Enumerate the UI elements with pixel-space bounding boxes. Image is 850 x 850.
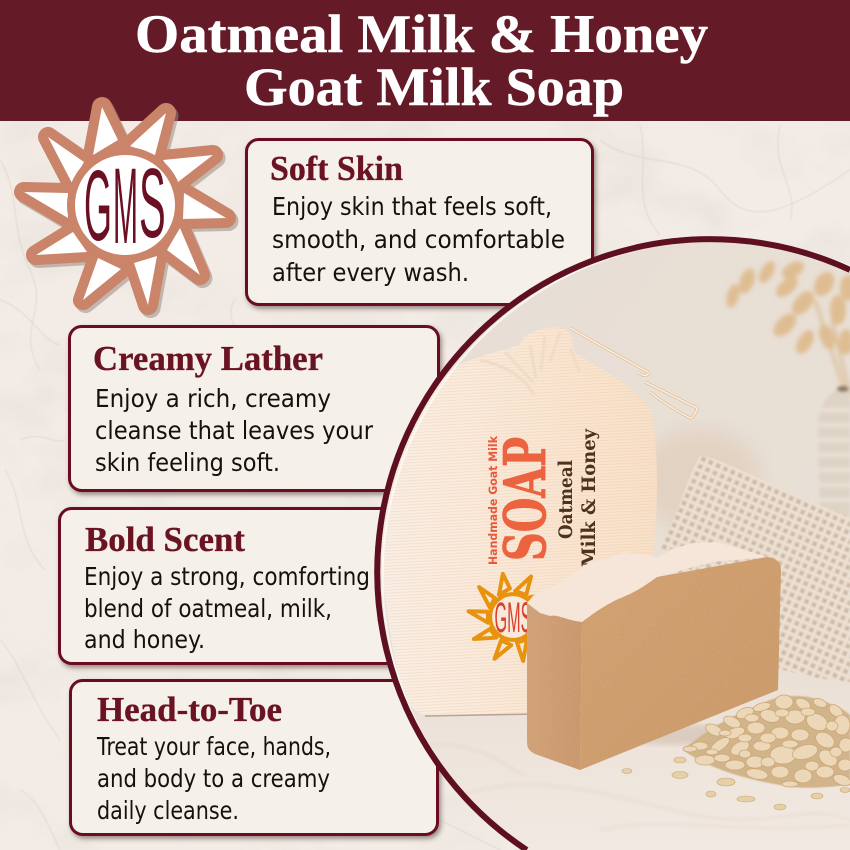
logo center disc (71, 151, 179, 259)
circle border (377, 239, 850, 850)
text: creamy lather: Enjoy a rich, creamy (95, 384, 331, 413)
stray oats (622, 757, 850, 810)
text: bold scent (84, 562, 370, 654)
text: bold scent: Enjoy a strong, comforting (84, 562, 370, 591)
bag label: soap: SOAP (492, 437, 559, 561)
cotton bag (379, 327, 697, 716)
heading: head-to-toe: Head-to-Toe (97, 690, 282, 729)
bag label: milk and honey: Milk & Honey (578, 428, 600, 567)
logo monogram: S (139, 148, 166, 258)
text: soft skin: Enjoy skin that feels soft, (272, 192, 552, 221)
icon: wheat stalks (724, 258, 850, 395)
text: bold scent: blend of oatmeal, milk, (84, 594, 332, 623)
soap speckles (527, 557, 781, 770)
text: creamy lather (95, 384, 374, 477)
text: soft skin: smooth, and comfortable (272, 225, 565, 254)
title: Oatmeal Milk & Honey (135, 4, 708, 64)
title banner (0, 0, 850, 121)
title (135, 4, 708, 117)
soap front face (580, 557, 781, 770)
heading: creamy lather: Creamy Lather (93, 339, 323, 378)
bag label: handmade goat milk: Handmade Goat Milk (486, 436, 500, 565)
text: head-to-toe: and body to a creamy (97, 764, 330, 793)
text: creamy lather: skin feeling soft. (95, 448, 280, 477)
soap top (527, 542, 767, 622)
icon: woven vase (818, 386, 850, 520)
icon: GMS sun logo (24, 107, 228, 308)
panel: creamy lather (70, 326, 438, 490)
heading: bold scent: Bold Scent (85, 520, 245, 559)
bag gathered neck (480, 332, 580, 395)
washcloth (660, 456, 850, 682)
logo shadow (26, 110, 228, 308)
text: creamy lather: cleanse that leaves your (95, 416, 374, 445)
soap bar (527, 542, 790, 770)
panel: head-to-toe (70, 680, 438, 834)
text: head-to-toe (96, 732, 331, 825)
heading: soft skin: Soft Skin (270, 149, 403, 188)
oats pile (622, 695, 850, 810)
panel: soft skin (246, 140, 592, 304)
logo rays (24, 107, 226, 305)
text: head-to-toe: daily cleanse. (97, 796, 239, 825)
logo monogram: G (84, 150, 112, 261)
bag drawstring (570, 328, 697, 418)
bag logo: GMS (495, 594, 531, 641)
text: soft skin (272, 192, 565, 287)
text: bold scent: and honey. (84, 625, 205, 654)
circular product photo (370, 230, 850, 850)
text: head-to-toe: Treat your face, hands, (96, 732, 331, 761)
bag logo (466, 572, 536, 663)
title: Goat Milk Soap (244, 57, 624, 117)
panel: bold scent (60, 508, 428, 664)
bag label: oatmeal: Oatmeal (555, 460, 577, 539)
soap side face (527, 603, 582, 770)
logo monogram (84, 145, 166, 266)
text: soft skin: after every wash. (272, 258, 469, 287)
logo monogram: M (113, 145, 138, 266)
